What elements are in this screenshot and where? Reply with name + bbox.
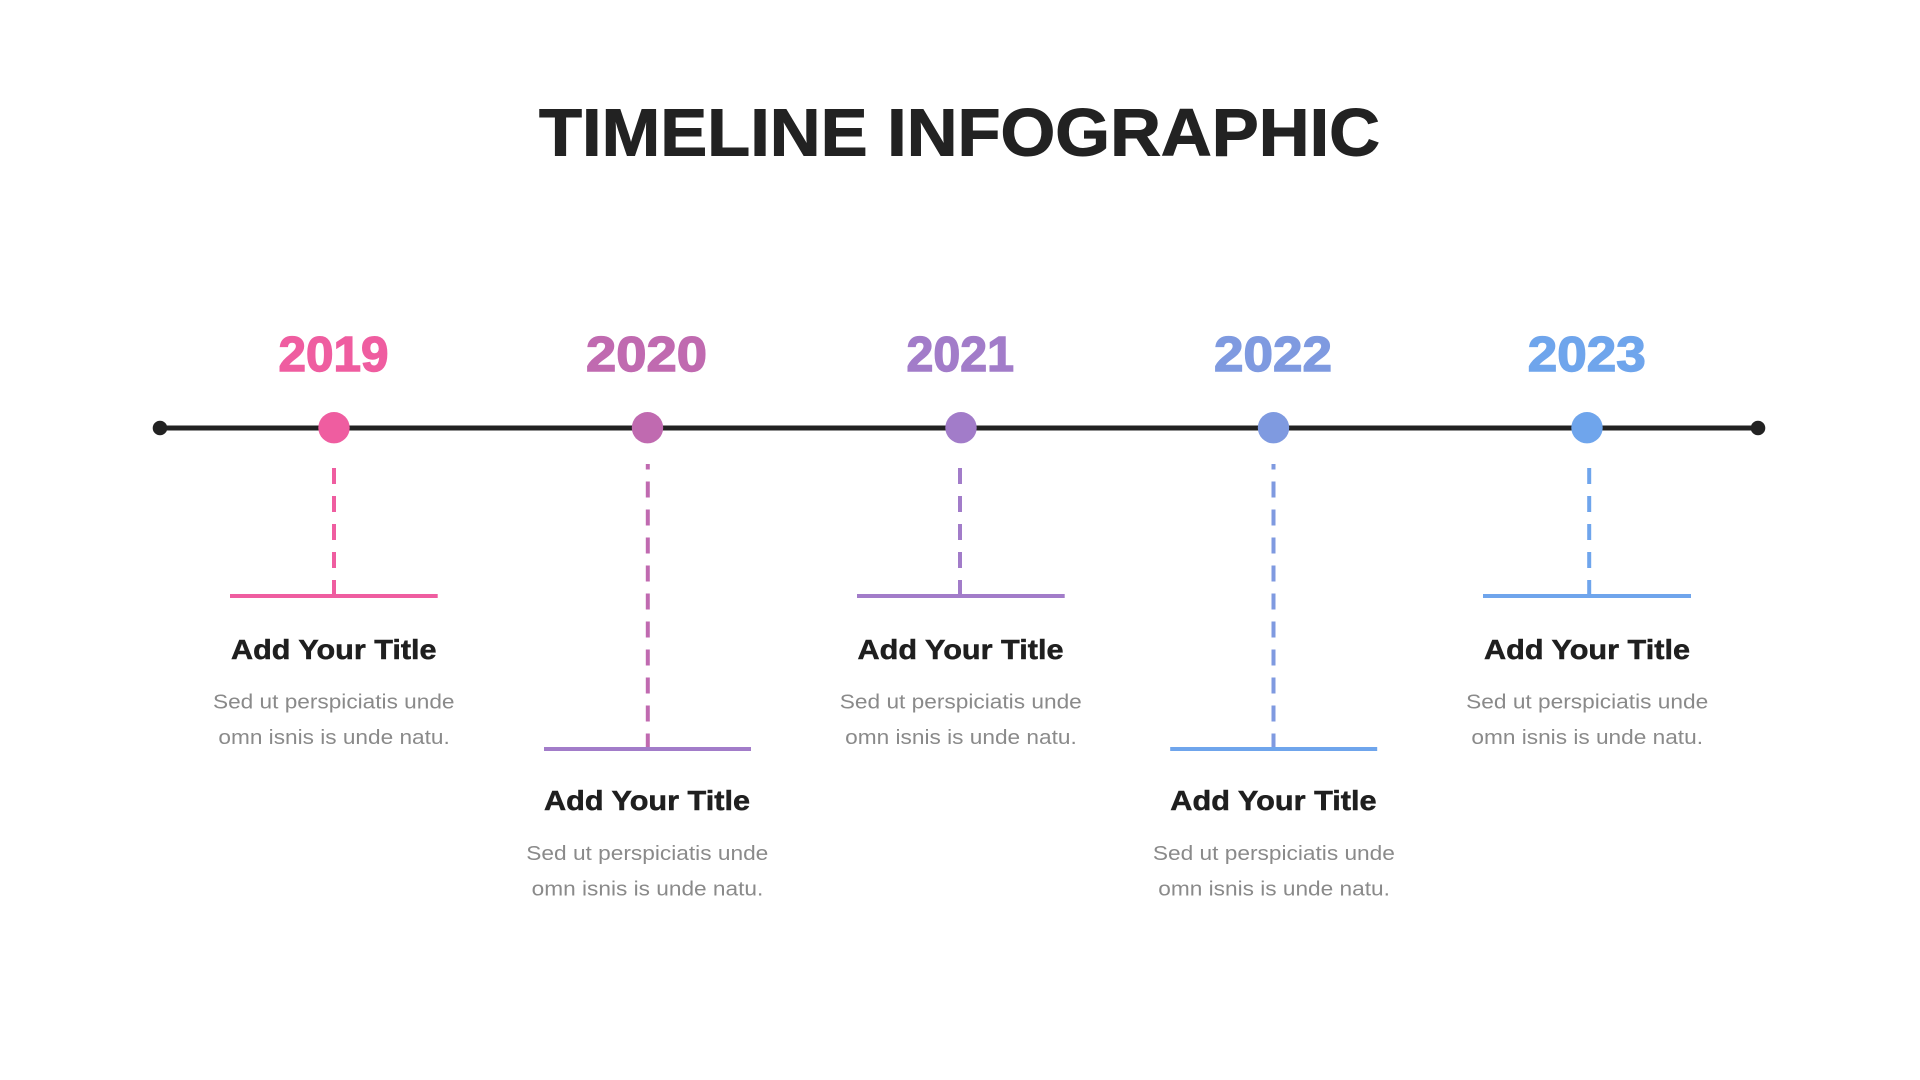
heading 2022: Add Your Title — [1170, 785, 1377, 816]
year 2019: 2019 — [278, 328, 388, 382]
year 2020: 2020 — [586, 328, 707, 382]
underline 2019 — [230, 594, 438, 598]
milestone 2023 — [1466, 328, 1708, 749]
marker 2021 — [945, 412, 977, 443]
milestone 2019 — [213, 328, 454, 749]
description 2021: Sed ut perspiciatis unde — [840, 691, 1082, 713]
timeline axis with end dots — [153, 421, 1765, 435]
description 2020: omn isnis is unde natu. — [532, 879, 763, 901]
description 2023: Sed ut perspiciatis unde — [1466, 691, 1708, 713]
description 2023: omn isnis is unde natu. — [1471, 727, 1703, 749]
milestone 2021 — [840, 328, 1082, 749]
underline 2023 — [1483, 594, 1691, 598]
description 2022: Sed ut perspiciatis unde — [1153, 843, 1395, 865]
heading 2023: Add Your Title — [1484, 634, 1690, 665]
description 2019 — [213, 691, 454, 749]
dashed connector 2021 — [958, 468, 962, 596]
year 2023: 2023 — [1528, 328, 1646, 382]
description 2019: omn isnis is unde natu. — [218, 727, 450, 749]
underline 2020 — [544, 747, 751, 751]
year 2022: 2022 — [1214, 328, 1332, 382]
marker 2022 — [1258, 412, 1289, 443]
heading 2021: Add Your Title — [858, 634, 1064, 665]
milestone 2020 — [526, 328, 768, 901]
description 2019: Sed ut perspiciatis unde — [213, 691, 454, 713]
description 2020 — [526, 843, 768, 901]
marker 2020 — [632, 412, 663, 443]
marker 2023 — [1571, 412, 1603, 443]
description 2021 — [840, 691, 1082, 749]
description 2020: Sed ut perspiciatis unde — [526, 843, 768, 865]
heading 2019: Add Your Title — [231, 634, 436, 665]
milestone 2022 — [1153, 328, 1395, 901]
title: TIMELINE INFOGRAPHIC — [539, 96, 1380, 170]
description 2023 — [1466, 691, 1708, 749]
description 2021: omn isnis is unde natu. — [845, 727, 1077, 749]
year 2021: 2021 — [906, 328, 1014, 382]
dashed connector 2022 — [1272, 464, 1276, 749]
heading 2020: Add Your Title — [544, 785, 750, 816]
dashed connector 2020 — [646, 464, 650, 749]
dashed connector 2019 — [332, 468, 336, 596]
underline 2021 — [857, 594, 1065, 598]
description 2022: omn isnis is unde natu. — [1158, 879, 1390, 901]
description 2022 — [1153, 843, 1395, 901]
dashed connector 2023 — [1587, 468, 1591, 596]
marker 2019 — [318, 412, 350, 443]
underline 2022 — [1170, 747, 1377, 751]
